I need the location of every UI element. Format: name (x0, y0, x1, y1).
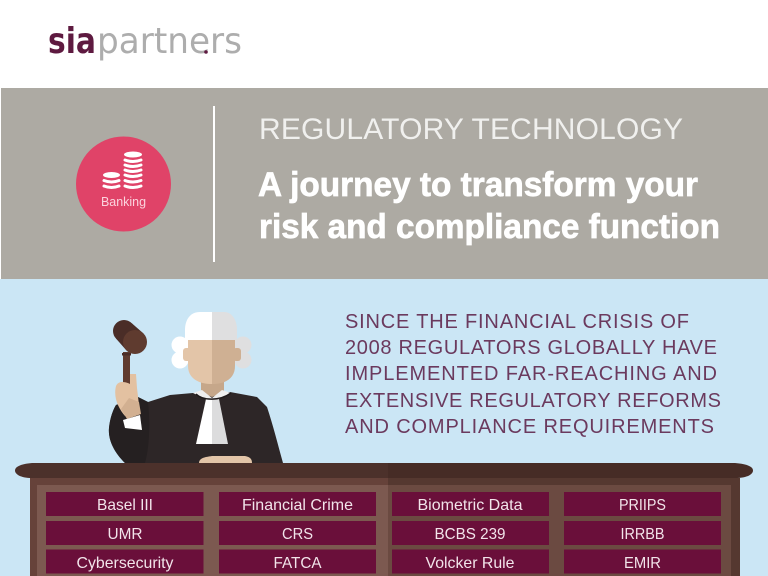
heading (258, 166, 720, 246)
icon: coin stacks (103, 152, 142, 188)
panel: header band (1, 88, 768, 279)
text block: intro: SINCE THE FINANCIAL CRISIS OF (345, 311, 689, 333)
tag labels: FATCA (274, 555, 322, 572)
tag labels (76, 497, 666, 572)
desk top (15, 463, 390, 478)
tag labels: Biometric Data (418, 497, 523, 514)
wig (172, 312, 252, 368)
tag labels: EMIR (624, 555, 661, 572)
text block: intro: 2008 REGULATORS GLOBALLY HAVE (345, 337, 717, 359)
divider (213, 106, 215, 262)
face (183, 340, 241, 384)
regulation tags (46, 492, 721, 574)
judge illustration (109, 312, 283, 463)
heading: A journey to transform your (258, 166, 698, 204)
tag labels: Volcker Rule (426, 555, 515, 572)
text block: intro (345, 311, 721, 438)
gavel (113, 320, 147, 386)
logo: sia partners: sia (48, 21, 96, 62)
shirt cuff (123, 415, 142, 430)
logo: sia partners: partners (97, 21, 242, 62)
tag labels: Cybersecurity (76, 555, 174, 572)
panel: desk (15, 463, 753, 576)
desk body (30, 478, 388, 576)
tag labels: BCBS 239 (434, 526, 506, 543)
tag labels: Basel III (97, 497, 153, 514)
text block: intro: IMPLEMENTED FAR-REACHING AND (345, 363, 717, 385)
neck (201, 378, 224, 397)
robe (109, 392, 283, 463)
hands on desk (199, 456, 252, 463)
banking badge (76, 136, 171, 232)
tag labels: PRIIPS (619, 497, 666, 514)
tag labels: Financial Crime (242, 497, 353, 514)
subtitle: REGULATORY TECHNOLOGY (259, 113, 683, 146)
heading: risk and compliance function (259, 208, 720, 246)
badge label: Banking (101, 194, 146, 209)
collar and bands (193, 390, 231, 444)
hand (115, 374, 139, 416)
tag labels: UMR (108, 526, 142, 543)
tag labels: IRRBB (620, 526, 664, 543)
text block: intro: EXTENSIVE REGULATORY REFORMS (345, 390, 721, 412)
text block: intro: AND COMPLIANCE REQUIREMENTS (345, 416, 714, 438)
tag labels: CRS (282, 526, 313, 543)
panel: blue background (0, 279, 768, 576)
